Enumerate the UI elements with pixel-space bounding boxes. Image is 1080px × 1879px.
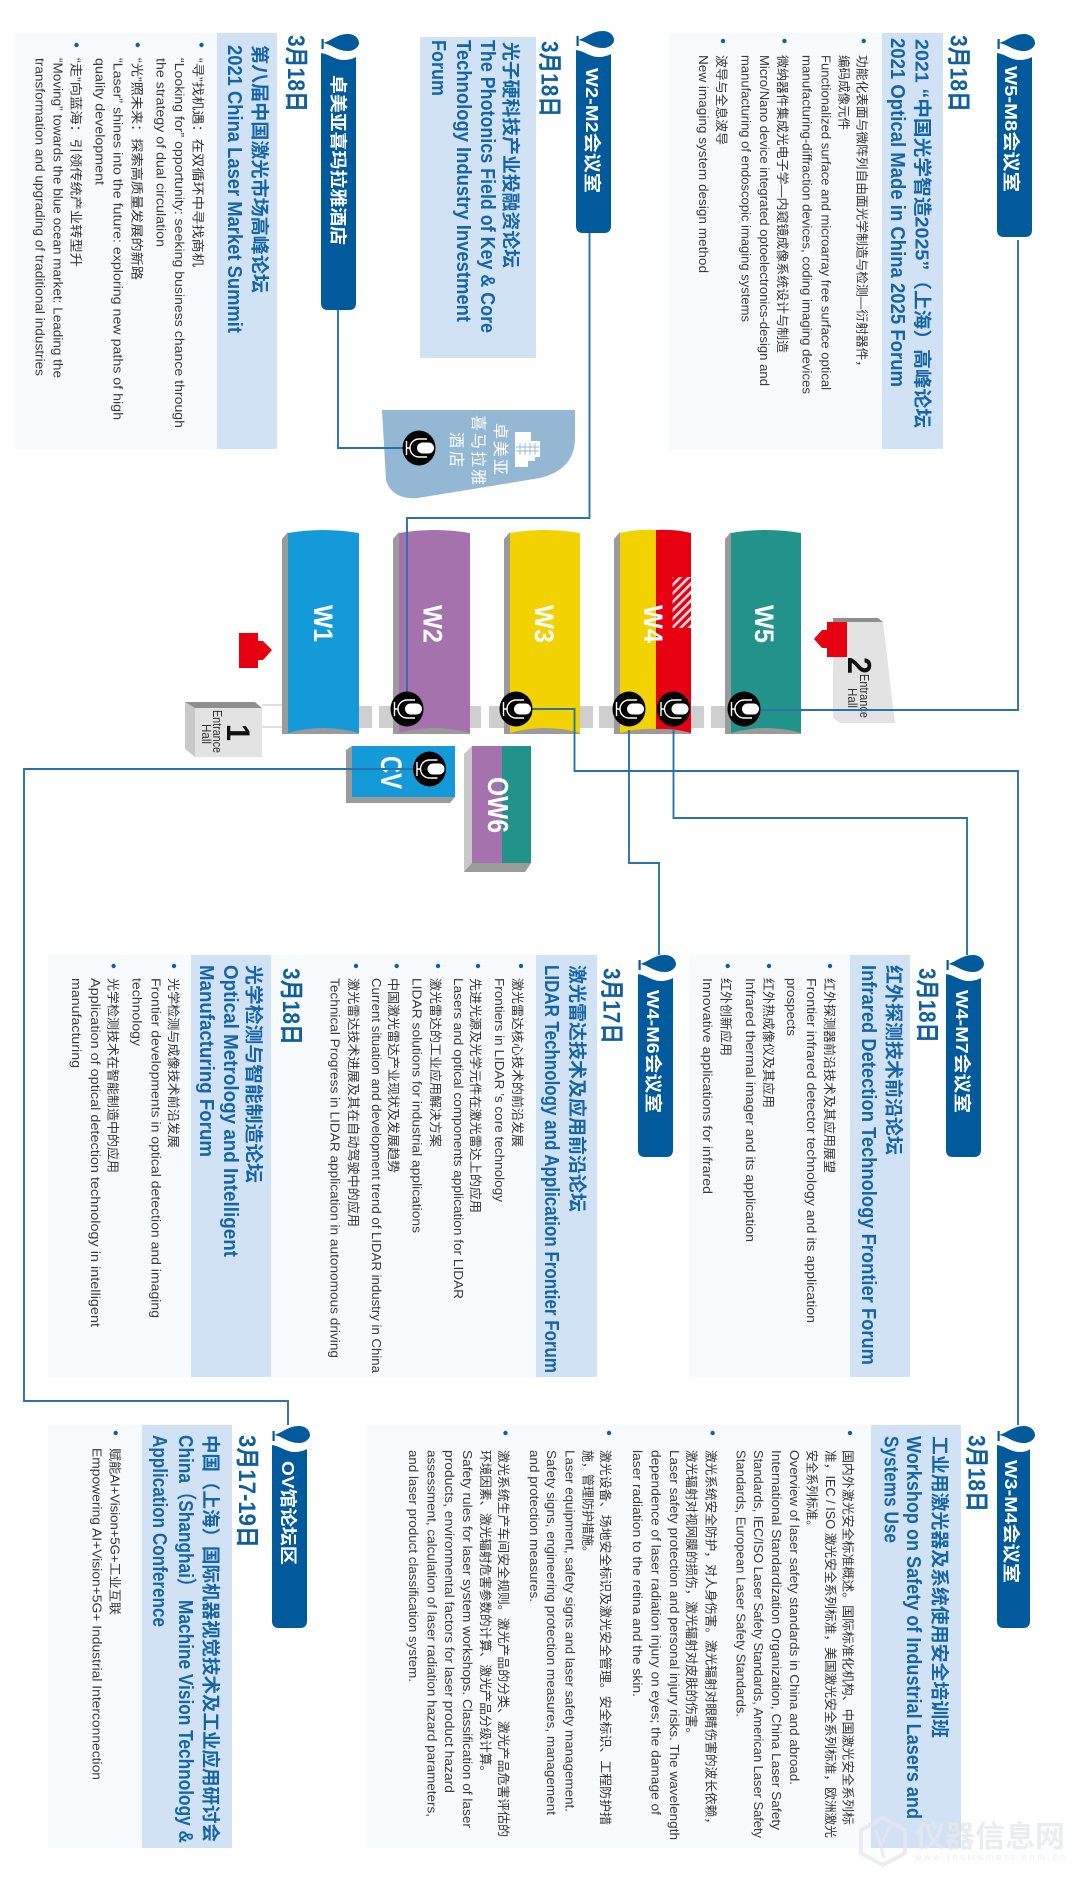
topic list: 先进光源及光学元件在激光雷达上的应用 [468, 978, 483, 1213]
tab: W4-M7 [946, 955, 984, 1157]
topic list: products, environmental factors for laser product hazard [442, 1450, 457, 1793]
tab: OV: OV馆论坛区 [278, 1461, 298, 1565]
topic list [328, 964, 525, 1374]
topic list: Standards, European Laser Safety Standards. [734, 1450, 748, 1717]
topic list: 环境因素、激光辐射危害参数的计算、激光产品分级计算。 [478, 1450, 493, 1778]
icon: hotel building [515, 432, 540, 467]
watermark: 仪器信息网 [915, 1821, 1065, 1854]
title: Infrared Detection Technology Frontier Forum [857, 965, 880, 1365]
date: 3月17日 [598, 968, 624, 1044]
topic list: manufacturing [69, 978, 84, 1068]
topic list: LIDAR solutions for industrial applications [410, 978, 424, 1234]
venue: hotel block [382, 410, 575, 498]
title [148, 1435, 221, 1843]
body background [689, 955, 850, 1377]
topic list: 波导与全息波导 [714, 55, 729, 145]
title: Manufacturing Forum [195, 965, 218, 1157]
topic list: Standards, IEC/ISO Laser Safety Standards, American Laser Safety [751, 1450, 766, 1838]
topic list: 光学检测与成像技术前沿发展 [166, 978, 181, 1148]
title [223, 45, 270, 333]
topic list: 光学检测技术在智能制造中的应用 [106, 978, 120, 1173]
topic list [69, 964, 181, 1327]
topic list [700, 964, 837, 1323]
body background [669, 33, 882, 449]
tab: W4-M7: W4-M7会议室 [952, 990, 972, 1113]
topic list [696, 39, 870, 395]
hotel name [447, 415, 509, 485]
topic list: 准，IEC / ISO 激光安全系列标准，美国激光安全系列标准，欧洲激光 [823, 1450, 838, 1838]
topic list: Micro/Nano device integrated optoelectronics-design and [757, 55, 772, 386]
title: 工业用激光器及系统使用安全培训班 [929, 1436, 950, 1738]
body background [48, 955, 191, 1377]
topic list: 安全系列标准。 [805, 1450, 820, 1532]
topic list: “寻”找机遇：在双循环中寻找商机 [190, 58, 206, 268]
hall W5: W5 [749, 605, 779, 643]
hotel name: 酒店 [447, 432, 465, 467]
topic list: manufacturing-diffraction devices, coding imaging devices [800, 55, 815, 395]
date: 3月17-19日 [233, 1435, 260, 1548]
topic list: Frontiers in LIDAR ’s core technology [492, 978, 507, 1203]
title [857, 965, 904, 1365]
topic list: “Laser” shines into the future: exploring new paths of high [111, 58, 126, 420]
title: 2021 China Laser Market Summit [223, 45, 246, 333]
topic list: and protection measures. [527, 1450, 542, 1602]
topic list: technology [130, 978, 145, 1047]
entrance hall 2: Entrance [857, 674, 871, 718]
topic list: quality development [93, 58, 108, 185]
topic list: Infrared thermal imager and its application [743, 978, 758, 1242]
title: Workshop on Safety of Industrial Lasers and [902, 1436, 925, 1819]
topic list: Laser equipment, safety signs and laser safety management. [563, 1450, 578, 1812]
topic list: prospects [784, 978, 799, 1036]
entrance hall 2 [833, 618, 895, 723]
tab: W5-M8: W5-M8会议室 [1001, 66, 1021, 192]
title: Optical Metrology and Intelligent [219, 965, 242, 1257]
topic list: 激光雷达核心技术的前沿发展 [510, 978, 525, 1147]
icon: microphone W4 left [612, 692, 646, 726]
tab: W2-M2 [576, 31, 614, 233]
title: 红外探测技术前沿论坛 [883, 965, 904, 1155]
body background [48, 1425, 142, 1848]
topic list: dependence of laser radiation injury on eyes; the damage of [648, 1450, 664, 1815]
title: 第八届中国激光市场高峰论坛 [249, 45, 270, 293]
topic list: 激光雷达技术进展及其在自动驾驶中的应用 [346, 978, 361, 1227]
panel: W4-M7 infrared forum [689, 955, 984, 1377]
hotel name: 喜马拉雅 [469, 415, 487, 485]
panel: W2-M2 photonics investment forum [420, 31, 614, 358]
topic list: Laser safety protection and personal injury risks. The wavelength [667, 1450, 682, 1840]
tab: W3-M4 [997, 1426, 1035, 1628]
hall W1: W1 [308, 605, 338, 642]
title [540, 965, 588, 1373]
title band [850, 955, 910, 1377]
topic list: assessment, calculation of laser radiation hazard parameters, [424, 1450, 440, 1817]
entrance hall 1: Entrance [210, 710, 224, 753]
topic list: Overview of laser safety standards in China and abroad. [787, 1450, 802, 1785]
entrance hall 1: 1 [220, 724, 256, 741]
topic list: Empowering AI+Vision+5G+ Industrial Interconnection [89, 1448, 104, 1780]
hall OW6: OW6 [481, 777, 513, 833]
body background [271, 955, 536, 1377]
title band [142, 1425, 232, 1848]
body background [15, 33, 217, 449]
date: 3月18日 [944, 35, 972, 112]
panel: W3-M4 laser safety workshop [367, 1425, 1035, 1848]
topic list: Frontier developments in optical detection and imaging [148, 978, 164, 1318]
topic list: 国内外激光安全标准概述。国际标准化机构、中国激光安全系列标 [840, 1450, 856, 1825]
title [427, 40, 521, 333]
entrance hall 1 [185, 702, 282, 757]
hall W4: W4 [638, 605, 668, 643]
panel: Emirates hotel China Laser Market Summit [15, 33, 359, 449]
topic list: Application of optical detection technology in intelligent [88, 978, 103, 1327]
topic list: Lasers and optical components application for LIDAR [451, 978, 466, 1299]
icon: microphone CV [413, 752, 446, 786]
panel: W4-M6 LIDAR forum [271, 955, 676, 1377]
topic list: Functionalized surface and microarray free surface optical [819, 55, 834, 390]
hall OW6 [464, 746, 531, 872]
title: Forum [427, 40, 450, 96]
hotel name: 卓美亚 [491, 423, 509, 475]
topic list: Current situation and development trend of LIDAR industry in China [369, 978, 384, 1374]
title band [217, 33, 277, 449]
topic list: 激光设备、场地安全标识及激光安全管理。安全标识、工程防护措 [598, 1450, 613, 1825]
topic list: the strategy of dual circulation [154, 58, 169, 247]
title [880, 1436, 950, 1819]
hall W4 [614, 530, 691, 734]
tab: W4-M6: W4-M6会议室 [643, 990, 663, 1113]
tab: W5-M8 [997, 34, 1035, 237]
topic list: New imaging system design method [696, 55, 711, 273]
icon: microphone W4 right [657, 692, 690, 726]
topic list: “光”照未来：探索高质量发展的新路 [130, 58, 145, 281]
topic list: Frontier infrared detector technology and its application [804, 978, 819, 1323]
topic list: 激光辐射对视网膜的损伤，激光辐射对皮肤的伤害。 [684, 1450, 699, 1740]
tab: hotel [321, 34, 359, 310]
topic list: laser radiation to the retina and the skin. [630, 1450, 645, 1697]
topic list: 激光系统安全防护，对人身伤害。激光辐射对眼睛伤害的波长依赖， [704, 1450, 719, 1830]
topic list: Safety rules for laser system workshops. Classification of laser [460, 1450, 475, 1829]
date: 3月18日 [282, 35, 309, 112]
topic list: Safety signs, engineering protection measures, management [544, 1450, 559, 1815]
hall W3 [504, 530, 580, 734]
entrance hall 2: 2 [841, 657, 878, 674]
topic list: Technical Progress in LIDAR application in autonomous driving [328, 978, 343, 1358]
icon: microphone W2 [390, 692, 424, 726]
title band [536, 955, 597, 1377]
title [886, 38, 932, 428]
topic list: 微纳器件集成光电子学—内窥镜成像系统设计与制造 [775, 55, 790, 354]
topic list: and laser product classification system. [406, 1450, 421, 1682]
hall CV [346, 746, 455, 803]
icon: microphone W3 [500, 692, 532, 726]
hall CV: CV [374, 756, 407, 789]
topic list: 赋能AI+Vision+5G+工业互联 [108, 1448, 122, 1616]
title: Application Conference [148, 1435, 171, 1627]
topic list: Innovative applications for infrared [700, 978, 715, 1194]
panel: W5-M8 Optical Made in China forum [669, 33, 1035, 449]
topic list: “Looking for” opportunity: seeking business chance through [172, 58, 187, 428]
panel: optical metrology forum [48, 955, 304, 1377]
tab: hotel: 卓美亚喜玛拉雅酒店 [328, 75, 348, 245]
hall W3: W3 [529, 605, 559, 643]
topic list: 红外创新应用 [718, 978, 734, 1056]
arrow: entrance 1 [239, 633, 272, 668]
title: 中国（上海）国际机器视觉技术及工业应用研讨会 [200, 1435, 221, 1842]
topic list: 中国激光雷达产业现状及发展趋势 [386, 978, 401, 1174]
title: The Photonics Field of Key & Core [476, 40, 499, 333]
topic list: 红外热成像仪及其应用 [761, 978, 776, 1108]
topic list: manufacturing of endoscopic imaging systems [738, 55, 754, 322]
watermark: www.instrument.com.cn [914, 1852, 1065, 1862]
body background [367, 1425, 871, 1848]
hall W2: W2 [418, 605, 448, 643]
title band [871, 1425, 961, 1848]
date: 3月18日 [536, 41, 562, 117]
hall W1 [282, 530, 359, 734]
icon: microphone hotel [402, 430, 436, 466]
tab: W4-M6 [638, 955, 676, 1157]
topic list [32, 43, 206, 428]
title: 激光雷达技术及应用前沿论坛 [566, 965, 588, 1212]
title [195, 965, 264, 1257]
entrance hall 1: Hall [199, 724, 213, 744]
icon: microphone W5 [728, 692, 760, 726]
topic list: 激光系统生产车间安全规则。激光产品的分类、激光产品危害评估的 [496, 1450, 511, 1837]
hall W2 [393, 530, 470, 734]
title band [882, 33, 943, 449]
title: Systems Use [880, 1436, 902, 1543]
arrow: entrance 2 [814, 622, 847, 657]
title: 光学检测与智能制造论坛 [243, 965, 264, 1183]
title: LIDAR Technology and Application Frontier Forum [540, 965, 563, 1373]
tab: W3-M4: W3-M4会议室 [1001, 1460, 1021, 1583]
topic list: 功能化表面与微阵列自由面光学制造与检测—衍射器件， [854, 55, 870, 373]
hall W5 [725, 530, 801, 734]
tab: OV [272, 1426, 310, 1628]
topic list: 红外探测器前沿技术及其应用展望 [822, 978, 837, 1173]
title band [420, 37, 536, 358]
title: 2021 Optical Made in China 2025 Forum [886, 38, 909, 387]
tab: W2-M2: W2-M2会议室 [582, 68, 602, 193]
connector pieces between halls [359, 706, 725, 728]
topic list [89, 1431, 122, 1780]
topic list: 施，管理防护措施。 [581, 1450, 596, 1558]
title: 2021 “中国光学智造2025”（上海）高峰论坛 [912, 39, 932, 428]
watermark [861, 1818, 1065, 1865]
topic list [406, 1431, 856, 1840]
topic list: transformation and upgrading of traditional industries [32, 58, 48, 377]
panel: OV machine vision conference [48, 1425, 310, 1848]
date: 3月18日 [962, 1435, 990, 1512]
topic list: “走”向蓝海：引领传统产业转型升 [69, 58, 84, 267]
connector lines [24, 233, 1018, 1425]
topic list: “Moving” towards the blue ocean market: Leading the [50, 58, 65, 378]
entrance hall 2: Hall [845, 688, 859, 708]
title: Technology Industry Investment [452, 40, 475, 322]
floor plan [185, 410, 895, 872]
date: 3月18日 [913, 968, 940, 1043]
topic list: International Standardization Organization, China Laser Safety [769, 1450, 784, 1831]
topic list: 激光雷达的工业应用解决方案 [428, 978, 443, 1148]
title: 光子硬科技产业投融资论坛 [500, 42, 521, 268]
topic list: 编码成像元件 [837, 55, 852, 130]
date: 3月18日 [277, 968, 304, 1045]
